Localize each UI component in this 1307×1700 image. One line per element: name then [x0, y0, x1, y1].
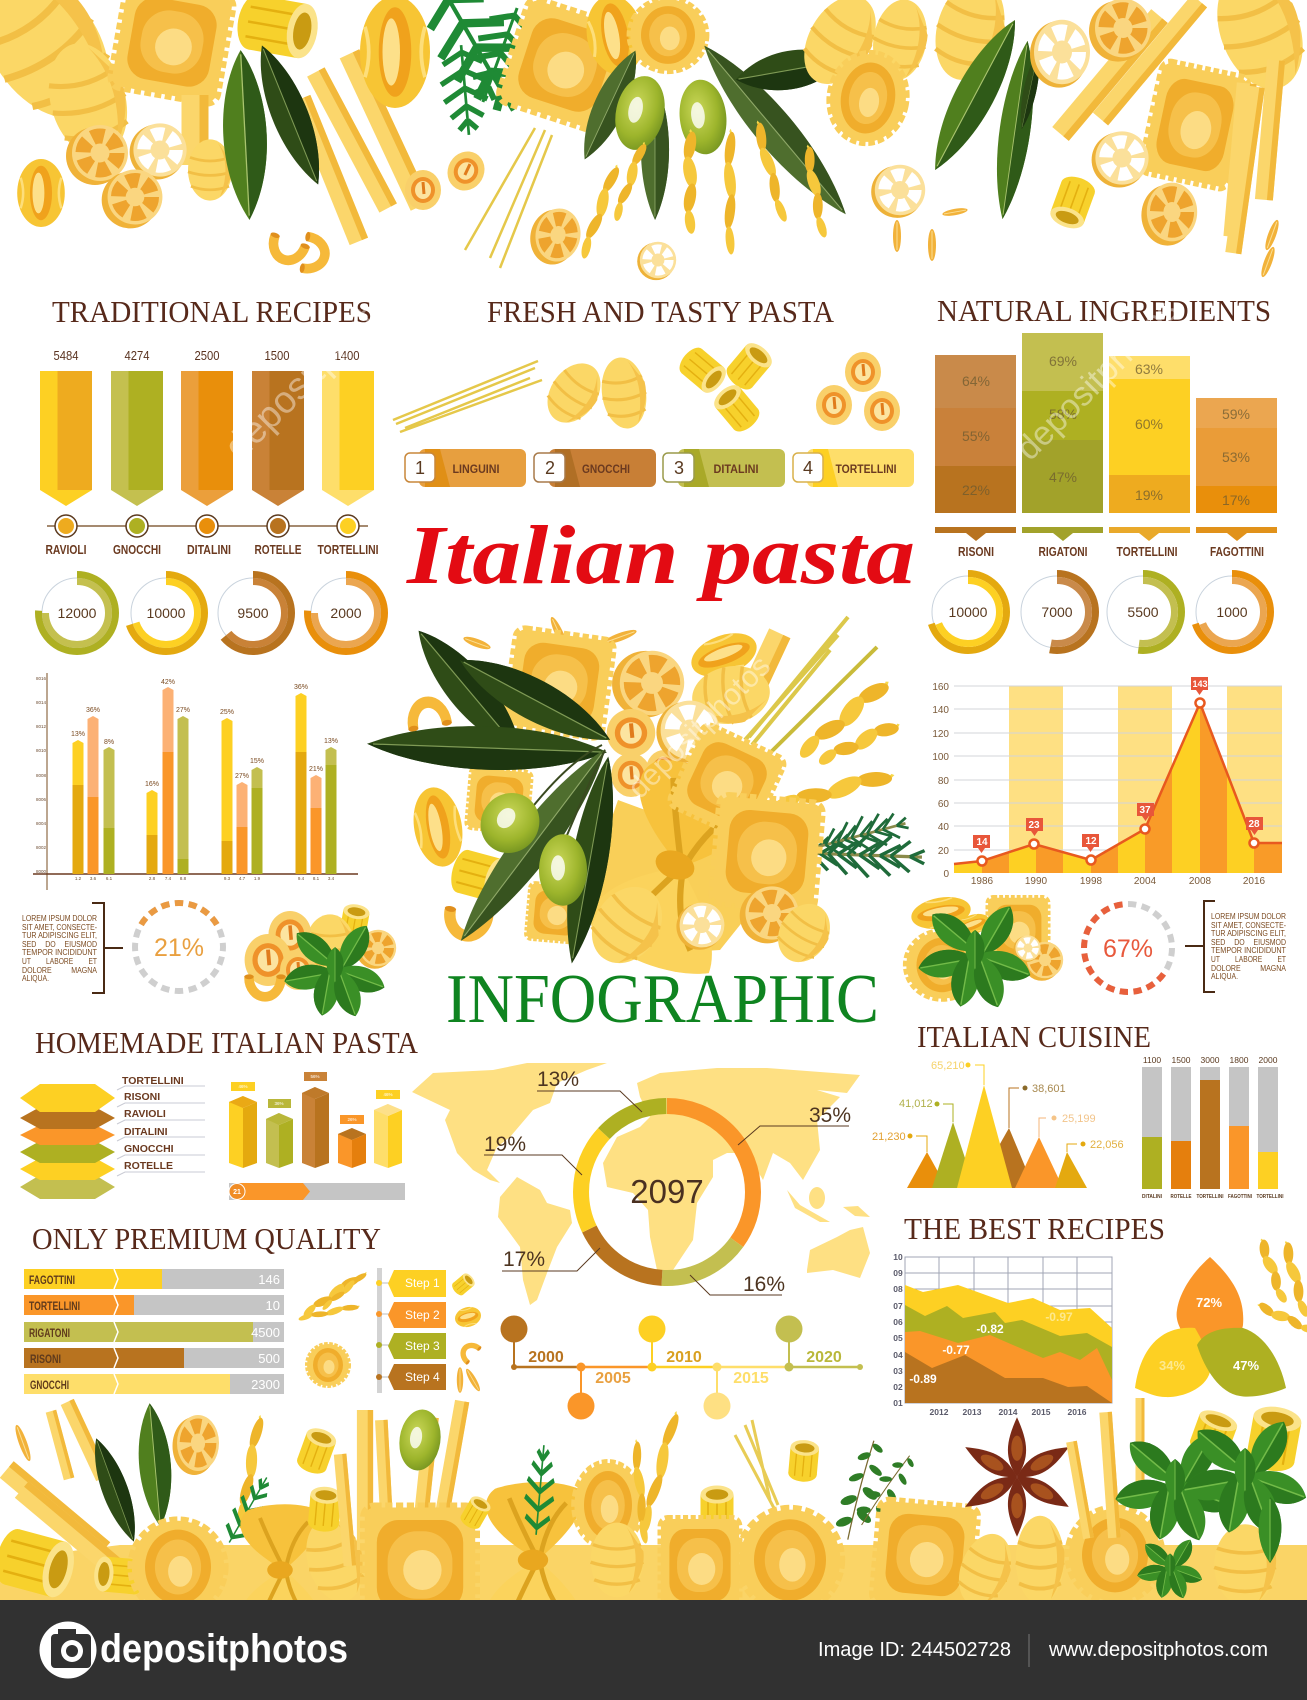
progress rows: premium quality: 2300: [251, 1377, 280, 1392]
icon: olive: [469, 781, 587, 906]
panel: arrow bars: 2500: [194, 348, 220, 363]
bar chart: grouped columns: 8008: [36, 773, 47, 778]
bar chart: grouped columns: 7.4: [165, 876, 172, 881]
bar chart: grouped columns: 8000: [36, 869, 47, 874]
illustration: central pasta bouquet: [366, 615, 925, 985]
stacked bars: natural ingredients: RIGATONI: [1038, 544, 1088, 559]
bar chart: grouped columns: 2.8: [149, 876, 156, 881]
text block: lorem left: UT LABORE ET: [22, 957, 97, 966]
icon: olives: [609, 71, 730, 157]
3d bar chart: 46%: [383, 1092, 393, 1097]
labels: numbered pasta pills: 1: [415, 458, 425, 478]
icon: thyme: [832, 1436, 920, 1544]
pasta border: top: [0, 0, 1307, 280]
3d bar chart: 46%: [238, 1084, 248, 1089]
layered area chart: 2014: [999, 1407, 1018, 1417]
petal venn chart: [1135, 1257, 1286, 1397]
donut charts: natural ingredients: 5500: [1127, 604, 1159, 620]
donut charts: natural ingredients: [930, 574, 1270, 650]
panel: timeline dots and names: DITALINI: [187, 542, 231, 557]
bar chart: grouped columns: 8016: [36, 676, 47, 681]
text block: lorem right: SIT AMET, CONSECTE-: [1211, 921, 1286, 930]
illustration: tortellini: [816, 352, 900, 431]
footer image id: Image ID: 244502728: [818, 1639, 1011, 1661]
bracket left: [92, 903, 123, 993]
illustration: fusilli right: [1253, 1236, 1307, 1339]
donut charts: natural ingredients: 7000: [1041, 604, 1073, 620]
text block: lorem left: SIT AMET, CONSECTE-: [22, 923, 97, 932]
icon: olive leaves: [366, 618, 626, 967]
stacked bars: natural ingredients: RISONI: [958, 544, 994, 559]
text block: lorem left: LOREM IPSUM DOLOR: [22, 914, 97, 923]
layered area chart: 07: [893, 1301, 903, 1311]
timeline: 2000-2020: 2000: [528, 1349, 564, 1366]
progress bar: 21: 21: [233, 1189, 241, 1196]
progress ring: 21%: 21%: [154, 934, 204, 962]
labels: numbered pasta pills: 3: [674, 458, 684, 478]
steps list: Step 4: [405, 1370, 440, 1384]
timeline: 2000-2020: 2005: [595, 1370, 631, 1387]
stacked bars: natural ingredients: 55%: [962, 428, 990, 444]
bar chart: grouped columns: 1.2: [75, 876, 82, 881]
area chart: yearly trend: [932, 677, 1282, 887]
progress bar: 21: [229, 1183, 405, 1200]
donut charts: traditional recipes: 12000: [58, 605, 97, 621]
stacked bars: natural ingredients: 59%: [1222, 406, 1250, 422]
layered area chart: 01: [893, 1398, 903, 1408]
heading: fresh and tasty pasta: FRESH AND TASTY PASTA: [487, 294, 835, 329]
layered area chart: 02: [893, 1382, 903, 1392]
bar chart: grouped columns: 8%: [104, 739, 114, 746]
layered area chart: 2013: [963, 1407, 982, 1417]
panel: arrow bars: 1500: [264, 348, 290, 363]
illustration: pasta with mint: [244, 902, 396, 1020]
stacked bars: natural ingredients: FAGOTTINI: [1210, 544, 1264, 559]
area chart: yearly trend: 37: [1139, 805, 1151, 816]
steps list: Step 2: [405, 1308, 440, 1322]
layered area chart: 08: [893, 1284, 903, 1294]
area chart: yearly trend: 40: [938, 822, 949, 833]
donut charts: traditional recipes: 9500: [237, 605, 269, 621]
timeline: 2000-2020: 2010: [666, 1349, 702, 1366]
steps list: [376, 1268, 446, 1393]
bar chart: grouped columns: 8.1: [313, 876, 320, 881]
bar chart: grouped columns: 8012: [36, 724, 47, 729]
heading: only premium quality: ONLY PREMIUM QUALITY: [32, 1221, 381, 1256]
icon: basil: [1113, 1414, 1307, 1601]
hexagon labels: TORTELLINI: [122, 1075, 184, 1087]
area chart: yearly trend: 140: [932, 705, 949, 716]
bar chart: grouped columns: 9.3: [224, 876, 231, 881]
watermark: [217, 271, 1185, 805]
donut charts: natural ingredients: 10000: [949, 604, 988, 620]
panel: arrow bars: 4274: [124, 348, 150, 363]
area chart: yearly trend: 60: [938, 799, 949, 810]
3d bar chart: 36%: [274, 1101, 284, 1106]
area chart: yearly trend: 80: [938, 776, 949, 787]
area chart: yearly trend: 1990: [1025, 876, 1048, 887]
petal venn chart: 47%: [1233, 1358, 1259, 1373]
layered area chart: [893, 1252, 1112, 1417]
text block: lorem right: ALIQUA.: [1211, 972, 1238, 981]
area chart: yearly trend: 2016: [1243, 876, 1266, 887]
progress ring: 67%: 67%: [1103, 935, 1153, 963]
layered area chart: -0.97: [1045, 1310, 1073, 1324]
donut chart: 2097: 19%: [484, 1133, 526, 1156]
petal venn chart: 34%: [1159, 1358, 1185, 1373]
icon: rigatoni: [233, 0, 322, 61]
bar chart: grouped columns: [33, 673, 358, 890]
stacked bars: natural ingredients: 19%: [1135, 487, 1163, 503]
hexagon labels: GNOCCHI: [124, 1143, 174, 1155]
icon: bay leaves left: [219, 39, 335, 221]
area chart: yearly trend: 0: [943, 869, 949, 880]
peak chart: 25,199: [1062, 1113, 1096, 1125]
panel: timeline dots and names: ROTELLE: [254, 542, 302, 557]
area chart: yearly trend: 160: [932, 682, 949, 693]
illustration: ditalini: [675, 338, 776, 436]
stacked bars: natural ingredients: 63%: [1135, 361, 1163, 377]
labels: numbered pasta pills: 2: [545, 458, 555, 478]
text block: lorem right: LOREM IPSUM DOLOR: [1211, 912, 1286, 921]
bar chart: grouped columns: 27%: [235, 773, 249, 780]
stacked bars: natural ingredients: 60%: [1135, 416, 1163, 432]
panel: arrow bars: 1400: [334, 348, 360, 363]
column chart: cuisine: 1500: [1172, 1055, 1191, 1065]
text block: lorem left: TEMPOR INCIDIDUNT: [22, 948, 97, 957]
labels: numbered pasta pills: [405, 449, 914, 487]
bar chart: grouped columns: 13%: [71, 731, 85, 738]
layered area chart: 2015: [1032, 1407, 1051, 1417]
pasta border: bottom: [0, 1398, 1307, 1638]
stacked bars: natural ingredients: 47%: [1049, 469, 1077, 485]
icons: step pasta: [450, 1271, 483, 1393]
timeline: 2000-2020: 2020: [806, 1349, 842, 1366]
stacked bars: natural ingredients: 58%: [1049, 406, 1077, 422]
peak chart: 38,601: [1032, 1083, 1066, 1095]
text block: lorem right: SED DO EIUSMOD: [1211, 938, 1286, 947]
column chart: cuisine: TORTELLINI: [1256, 1194, 1284, 1200]
steps list: Step 3: [405, 1339, 440, 1353]
illustration: fusilli and tortelli: [297, 1268, 369, 1386]
world map: [412, 1063, 870, 1305]
area chart: yearly trend: 2008: [1189, 876, 1212, 887]
area chart: yearly trend: 1998: [1080, 876, 1103, 887]
timeline: 2000-2020: 2015: [733, 1370, 769, 1387]
bar chart: grouped columns: 4.7: [239, 876, 246, 881]
hexagon labels: RISONI: [124, 1091, 160, 1103]
panel: timeline dots and names: GNOCCHI: [113, 542, 161, 557]
bar chart: grouped columns: 8014: [36, 700, 47, 705]
footer logo text: depositphotos: [100, 1627, 348, 1671]
area chart: yearly trend: 143: [1192, 679, 1208, 689]
footer bar: [0, 1600, 1307, 1700]
column chart: cuisine: DITALINI: [1142, 1194, 1163, 1200]
progress rows: premium quality: RISONI: [30, 1352, 61, 1366]
icon: bay leaves: [84, 1402, 176, 1546]
progress rows: premium quality: RIGATONI: [29, 1326, 70, 1340]
illustration: linguine: [393, 361, 542, 432]
hexagon labels: [117, 1075, 205, 1176]
bracket right: [1185, 901, 1215, 992]
progress rows: premium quality: [24, 1269, 284, 1394]
heading: homemade italian pasta: HOMEMADE ITALIAN PASTA: [35, 1025, 419, 1060]
area chart: yearly trend: 28: [1248, 819, 1260, 830]
panel: arrow bars: [40, 348, 374, 506]
icon: ravioli: [111, 0, 233, 103]
peak chart: [872, 1060, 1124, 1188]
bar chart: grouped columns: 8002: [36, 845, 47, 850]
bar chart: grouped columns: 25%: [220, 709, 234, 716]
bar chart: grouped columns: 15%: [250, 758, 264, 765]
stacked bars: natural ingredients: TORTELLINI: [1116, 544, 1178, 559]
area chart: yearly trend: 2004: [1134, 876, 1157, 887]
icon: rocket leaves: [411, 0, 545, 137]
hexagon labels: ROTELLE: [124, 1160, 173, 1172]
bar chart: grouped columns: 36%: [294, 684, 308, 691]
donut charts: traditional recipes: 10000: [147, 605, 186, 621]
3d bar chart: [229, 1072, 402, 1168]
hexagon labels: RAVIOLI: [124, 1108, 166, 1120]
column chart: cuisine: TORTELLINI: [1196, 1194, 1224, 1200]
column chart: cuisine: [1142, 1055, 1284, 1200]
icon: rosemary: [218, 1471, 278, 1549]
labels: numbered pasta pills: DITALINI: [714, 462, 758, 476]
layered area chart: -0.82: [976, 1322, 1004, 1336]
illustration: pasta with basil: [906, 893, 1063, 1012]
column chart: cuisine: 2000: [1259, 1055, 1278, 1065]
bar chart: grouped columns: 16%: [145, 781, 159, 788]
stacked bars: natural ingredients: 53%: [1222, 449, 1250, 465]
heading: traditional recipes: TRADITIONAL RECIPES: [52, 294, 372, 329]
3d bar chart: 26%: [347, 1117, 357, 1122]
title: italian pasta: Italian pasta: [406, 509, 915, 602]
bar chart: grouped columns: 36%: [86, 707, 100, 714]
heading: the best recipes: THE BEST RECIPES: [904, 1211, 1165, 1246]
layered area chart: -0.89: [909, 1372, 937, 1386]
steps list: Step 1: [405, 1276, 440, 1290]
bar chart: grouped columns: 3.6: [90, 876, 97, 881]
layered area chart: 10: [893, 1252, 903, 1262]
watermark: depositphotos: [622, 650, 777, 805]
layered area chart: 06: [893, 1317, 903, 1327]
area chart: yearly trend: 14: [976, 837, 988, 848]
timeline: 2000-2020: [500, 1316, 863, 1420]
area chart: yearly trend: 20: [938, 846, 949, 857]
layered area chart: 2016: [1068, 1407, 1087, 1417]
bar chart: grouped columns: 8.8: [180, 876, 187, 881]
bar chart: grouped columns: 8010: [36, 748, 47, 753]
icon: olive: [396, 1407, 444, 1473]
area chart: yearly trend: 23: [1028, 820, 1040, 831]
donut charts: natural ingredients: 1000: [1216, 604, 1248, 620]
layered area chart: 09: [893, 1268, 903, 1278]
progress rows: premium quality: TORTELLINI: [29, 1299, 80, 1313]
donut charts: traditional recipes: 2000: [330, 605, 362, 621]
hexagon labels: DITALINI: [124, 1126, 168, 1138]
bar chart: grouped columns: 21%: [309, 766, 323, 773]
column chart: cuisine: 1800: [1230, 1055, 1249, 1065]
text block: lorem left: TUR ADIPISCING ELIT,: [22, 931, 97, 940]
text block: lorem right: TEMPOR INCIDIDUNT: [1211, 946, 1286, 955]
text block: lorem right: [1211, 912, 1287, 981]
text block: lorem right: TUR ADIPISCING ELIT,: [1211, 929, 1286, 938]
icon: bay leaves right: [918, 11, 1045, 221]
layered area chart: 2012: [930, 1407, 949, 1417]
footer url: www.depositphotos.com: [1048, 1639, 1268, 1661]
bar chart: grouped columns: 8004: [36, 821, 47, 826]
icon: shell: [360, 0, 430, 108]
panel: arrow bars: 5484: [54, 348, 78, 363]
heading: infographic: INFOGRAPHIC: [446, 961, 879, 1038]
donut chart: 2097: 13%: [537, 1068, 579, 1091]
watermark: depositphotos: [1009, 291, 1185, 468]
peak chart: 41,012: [899, 1098, 933, 1110]
text block: lorem right: DOLORE MAGNA: [1211, 964, 1287, 973]
peak chart: 22,056: [1090, 1139, 1124, 1151]
column chart: cuisine: 3000: [1201, 1055, 1220, 1065]
heading: italian cuisine: ITALIAN CUISINE: [917, 1019, 1151, 1054]
labels: numbered pasta pills: GNOCCHI: [582, 462, 630, 476]
icon: depositphotos logo: [40, 1622, 96, 1678]
column chart: cuisine: FAGOTTINI: [1228, 1194, 1253, 1200]
bar chart: grouped columns: 1.9: [254, 876, 261, 881]
stacked hexagons: [20, 1084, 115, 1199]
labels: numbered pasta pills: LINGUINI: [452, 462, 500, 476]
area chart: yearly trend: 1986: [971, 876, 994, 887]
progress rows: premium quality: 500: [258, 1351, 280, 1366]
labels: numbered pasta pills: TORTELLINI: [836, 462, 896, 476]
bar chart: grouped columns: 8006: [36, 797, 47, 802]
peak chart: 21,230: [872, 1131, 906, 1143]
labels: numbered pasta pills: 4: [803, 458, 813, 478]
area chart: yearly trend: 12: [1085, 836, 1097, 847]
layered area chart: 04: [893, 1350, 903, 1360]
layered area chart: 03: [893, 1366, 903, 1376]
stacked bars: natural ingredients: 22%: [962, 482, 990, 498]
text block: lorem left: [22, 914, 98, 983]
area chart: yearly trend: 120: [932, 729, 949, 740]
column chart: cuisine: 1100: [1143, 1055, 1161, 1065]
progress rows: premium quality: FAGOTTINI: [29, 1273, 75, 1287]
layered area chart: 05: [893, 1333, 903, 1343]
peak chart: 65,210: [931, 1060, 965, 1072]
donut chart: 2097: [484, 1068, 851, 1296]
stacked bars: natural ingredients: 64%: [962, 373, 990, 389]
icon: star anise: [961, 1417, 1073, 1537]
text block: lorem right: UT LABORE ET: [1211, 955, 1286, 964]
panel: timeline dots and names: [46, 515, 378, 557]
heading: natural ingredients: NATURAL INGREDIENTS: [937, 293, 1271, 328]
panel: timeline dots and names: RAVIOLI: [46, 542, 86, 557]
panel: timeline dots and names: TORTELLINI: [318, 542, 378, 557]
stacked bars: natural ingredients: 69%: [1049, 353, 1077, 369]
progress ring: 67%: [1084, 904, 1172, 992]
watermark: depositphotos: [217, 271, 414, 468]
3d bar chart: 56%: [310, 1074, 320, 1079]
stacked bars: natural ingredients: 17%: [1222, 492, 1250, 508]
column chart: cuisine: ROTELLE: [1170, 1194, 1192, 1200]
donut chart: 2097: 16%: [743, 1273, 785, 1296]
bar chart: grouped columns: 27%: [176, 707, 190, 714]
petal venn chart: 72%: [1196, 1295, 1222, 1310]
donut chart: 2097: 2097: [630, 1173, 704, 1210]
bar chart: grouped columns: 3.4: [328, 876, 335, 881]
bar chart: grouped columns: 6.1: [106, 876, 113, 881]
area chart: yearly trend: 100: [932, 752, 949, 763]
progress ring: 21%: [119, 887, 239, 1007]
bar chart: grouped columns: 42%: [161, 679, 175, 686]
donut chart: 2097: 17%: [503, 1248, 545, 1271]
progress rows: premium quality: 4500: [251, 1325, 280, 1340]
progress rows: premium quality: 146: [258, 1272, 280, 1287]
progress rows: premium quality: 10: [266, 1298, 280, 1313]
text block: lorem left: DOLORE MAGNA: [22, 966, 98, 975]
donut chart: 2097: 35%: [809, 1104, 851, 1127]
illustration: gnocchi: [537, 353, 651, 433]
donut charts: traditional recipes: [38, 574, 384, 652]
text block: lorem left: ALIQUA.: [22, 974, 49, 983]
progress rows: premium quality: GNOCCHI: [30, 1378, 69, 1392]
bar chart: grouped columns: 13%: [324, 738, 338, 745]
bar chart: grouped columns: 9.4: [298, 876, 305, 881]
layered area chart: -0.77: [942, 1343, 970, 1357]
stacked bars: natural ingredients: [935, 333, 1277, 559]
text block: lorem left: SED DO EIUSMOD: [22, 940, 97, 949]
icon: olive branch leaves: [571, 33, 860, 227]
